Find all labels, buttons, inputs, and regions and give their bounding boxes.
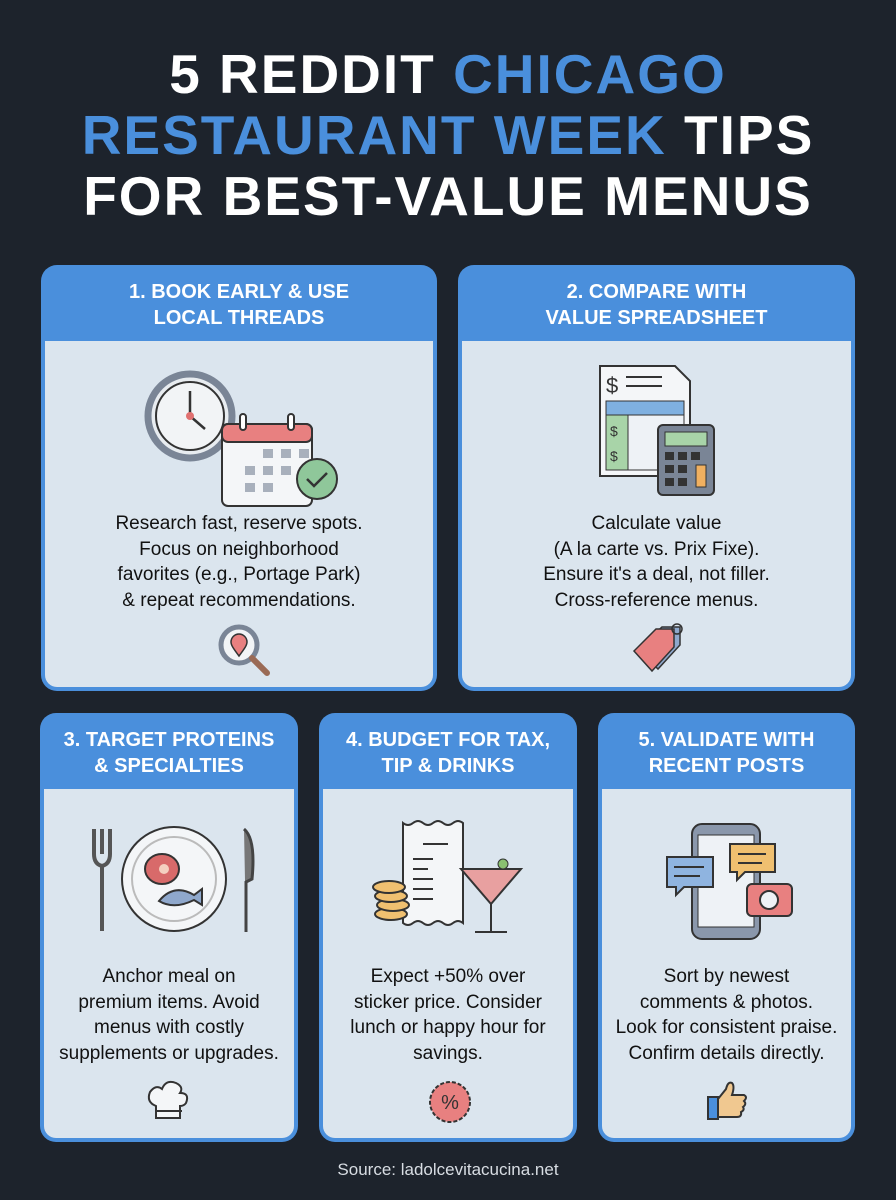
heading 1: 1. BOOK EARLY & USE [129,281,349,303]
icon: thumbs up [707,1082,747,1120]
text 2: Cross-reference menus. [555,590,758,610]
icon: discount badge: % [441,1092,459,1114]
text 5 [616,966,837,1064]
text 1: & repeat recommendations. [122,590,356,610]
title [82,43,814,227]
text 1: Focus on neighborhood [139,538,339,560]
heading 2: 2. COMPARE WITH [567,281,746,303]
source footer: Source: ladolcevitacucina.net [337,1160,559,1179]
text 2 [543,513,770,610]
title: 5 REDDIT CHICAGO [169,43,727,105]
text 5: Sort by newest [664,966,789,987]
text 3: supplements or upgrades. [59,1042,279,1064]
heading 2: VALUE SPREADSHEET [546,307,767,329]
heading 1: LOCAL THREADS [154,307,324,329]
text 3 [59,966,279,1064]
text 4: lunch or happy hour for [350,1017,546,1038]
text 3: premium items. Avoid [78,992,260,1012]
icon: price tag [633,623,683,672]
text 1 [115,513,363,610]
heading 5: RECENT POSTS [649,755,804,777]
icon: spreadsheet and calculator [599,365,715,496]
text 2: Calculate value [592,513,721,534]
icon: spreadsheet and calculator: $ [610,448,618,464]
heading 4: TIP & DRINKS [382,755,514,777]
icon: map search [218,624,270,676]
heading 3: & SPECIALTIES [94,755,244,777]
heading 4 [346,729,550,777]
text 1: favorites (e.g., Portage Park) [118,564,360,585]
text 4: sticker price. Consider [354,992,542,1012]
title: FOR BEST-VALUE MENUS [83,165,813,227]
heading 5 [639,729,814,777]
text 2: (A la carte vs. Prix Fixe). [554,538,759,560]
panel: book early [41,265,437,691]
text 5: Look for consistent praise. [616,1017,837,1038]
icon: discount badge [429,1081,471,1123]
text 5: comments & photos. [640,992,813,1012]
text 4 [350,966,546,1064]
text 3: menus with costly [94,1017,244,1038]
panel: compare spreadsheet [458,265,855,691]
text 5: Confirm details directly. [628,1042,825,1064]
panel: budget [319,713,577,1142]
heading 3: 3. TARGET PROTEINS [64,729,274,751]
panel: proteins [40,713,298,1142]
icon: phone with chat bubbles and camera [666,823,793,940]
text 3: Anchor meal on [102,966,236,987]
heading 4: 4. BUDGET FOR TAX, [346,729,550,751]
icon: plate with steak and fish [92,826,254,932]
text 1: Research fast, reserve spots. [115,513,363,534]
heading 3 [64,729,274,777]
icon: clock and calendar [144,370,338,507]
text 4: savings. [413,1042,483,1064]
icon: chef hat [148,1080,188,1119]
icon: spreadsheet and calculator: $ [606,373,618,398]
heading 5: 5. VALIDATE WITH [639,729,814,751]
panel: validate [598,713,855,1142]
text 4: Expect +50% over [371,966,525,987]
heading 1 [129,281,349,329]
heading 2 [546,281,768,329]
icon: spreadsheet and calculator: $ [610,423,618,439]
icon: receipt, coins, cocktail [372,820,524,933]
title: RESTAURANT WEEK TIPS [82,104,814,166]
text 2: Ensure it's a deal, not filler. [543,564,770,585]
